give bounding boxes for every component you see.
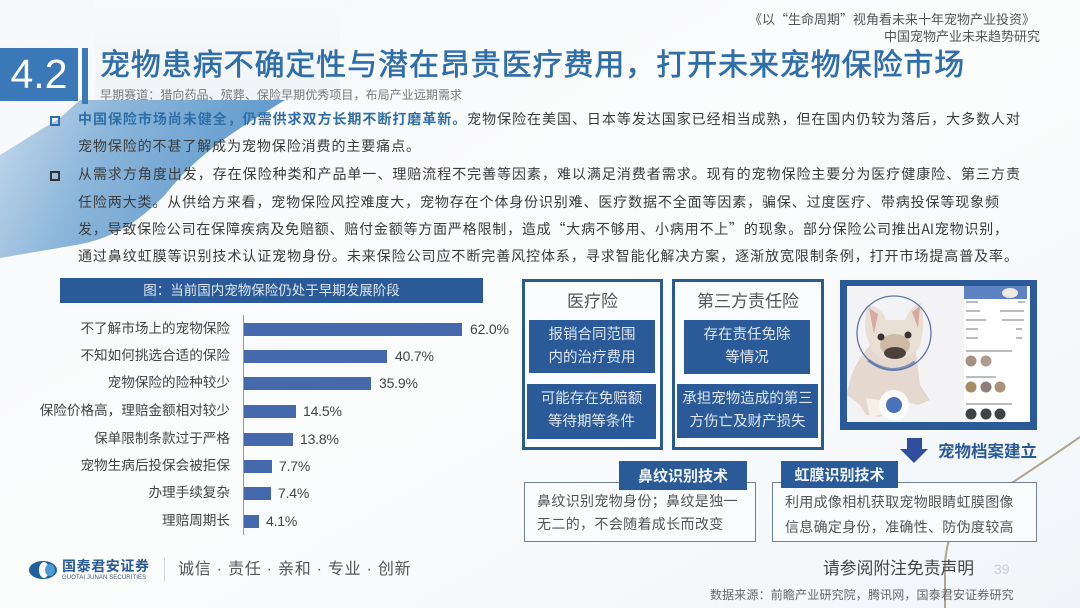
bar chart [40,315,509,535]
bar chart: 35.9% [379,375,418,391]
text block: market overview [50,109,1020,156]
liability box: 方伤亡及财产损失 [690,414,806,430]
data source: 数据来源：前瞻产业研究院，腾讯网，国泰君安证券研究 [710,588,1014,602]
liability box [677,384,818,438]
panel heading [781,461,898,488]
bar chart: 不了解市场上的宠物保险 [80,321,230,336]
logo: Guotai Junan: 国泰君安证券 [62,558,150,574]
sub heading: 早期赛道：猎向药品、殡葬、保险早期优秀项目，布局产业远期需求 [100,88,462,102]
disclaimer: 请参阅附注免责声明 [823,559,974,578]
report title top right: 《以“生命周期”视角看未来十年宠物产业投资》 [749,9,1035,28]
section number [0,48,78,101]
bar chart: 14.5% [303,403,342,419]
text block: demand and supply: 任险两大类。从供给方来看，宠物保险风控难度大，宠物存在个体身份识别难、医疗数据不全面等因素，骗保、过度医疗、带病投保等现象频 [78,192,999,212]
bar chart: 保单限制条款过于严格 [94,431,230,446]
bar chart: 保险价格高，理赔金额相对较少 [40,403,230,418]
panel body: 利用成像相机获取宠物眼睛虹膜图像 [785,494,1014,510]
report title top right: 中国宠物产业未来趋势研究 [884,26,1040,45]
panel heading: 医疗险 [567,292,618,311]
text block: demand and supply [50,164,1020,266]
panel body: 无二的，不会随着成长而改变 [537,516,724,532]
panel heading: 鼻纹识别技术 [638,468,728,485]
icon: logo mark [29,561,57,579]
text block: market overview: 宠物保险的不甚了解成为宠物保险消费的主要痛点。 [78,136,420,156]
bar chart: 宠物生病后投保会被拒保 [80,458,230,473]
exemption box: 等情况 [725,350,769,366]
coverage box [529,320,655,373]
text block: market overview: 中国保险市场尚未健全，仍需供求双方长期不断打磨革新。宠物保险在美国、日本等发达国家已经相当成熟，但在国内仍较为落后，大多数人对 [78,109,1020,129]
bar chart: 理赔周期长 [162,513,230,528]
panel body: 鼻纹识别宠物身份；鼻纹是独一 [537,493,738,509]
bar chart: 办理手续复杂 [148,485,230,500]
bar chart: 7.7% [279,458,310,474]
conditions box: 可能存在免赔额 [541,391,642,407]
text block: demand and supply: 发，导致保险公司在保障疾病及免赔额、赔付金额等方面严格限制，造成“大病不够用、小病用不上”的现象。部分保险公司推出AI宠物识别， [78,219,1008,239]
bullet square [50,171,60,181]
panel heading: 第三方责任险 [697,292,799,311]
divider [164,558,165,581]
chart title bar: 图：当前国内宠物保险仍处于早期发展阶段 [143,283,400,298]
bar chart: 4.1% [266,513,297,529]
arrow: down [900,438,928,463]
main heading: 宠物患病不确定性与潜在昂贵医疗费用，打开未来宠物保险市场 [100,49,965,82]
panel body [524,482,756,542]
accent bar [82,48,88,104]
logo: Guotai Junan [29,558,150,581]
conditions box: 等待期等条件 [548,414,635,430]
liability box: 承担宠物造成的第三 [682,391,813,407]
bar chart: 13.8% [300,431,339,447]
logo: Guotai Junan: GUOTAI JUNAN SECURITIES [62,575,146,581]
page number: 39 [994,561,1010,577]
caption: pet profile: 宠物档案建立 [938,443,1037,461]
bar chart: 宠物保险的险种较少 [108,375,230,390]
bar chart: 不知如何挑选合适的保险 [80,348,230,363]
panel heading [619,461,747,490]
text block: demand and supply: 通过鼻纹虹膜等识别技术认证宠物身份。未来保险公司应不断完善风控体系，寻求智能化解决方案，逐渐放宽限制条例，打开市场提高普及率。 [78,246,1018,266]
conditions box [527,384,656,439]
exemption box [684,320,810,374]
panel: iris technology [772,461,1037,542]
coverage box: 内的治疗费用 [548,350,636,366]
panel body [772,482,1037,542]
bar chart: 7.4% [278,485,309,501]
section number: 4.2 [10,51,68,97]
report title top right [749,9,1040,45]
exemption box: 存在责任免除 [704,327,790,343]
text block: demand and supply: 从需求方角度出发，存在保险种类和产品单一、理赔流程不完善等因素，难以满足消费者需求。现有的宠物保险主要分为医疗健康险、第三方责 [78,164,1020,184]
coverage box: 报销合同范围 [548,327,636,343]
bar chart: 62.0% [470,321,509,337]
slogan: 诚信 · 责任 · 亲和 · 专业 · 创新 [178,561,411,578]
bar chart: 40.7% [395,348,434,364]
panel body: 信息确定身份，准确性、防伪度较高 [785,519,1014,535]
panel heading: 虹膜识别技术 [794,467,884,484]
panel: medical insurance [522,279,663,450]
panel: nose print technology [524,461,756,542]
bullet square [50,116,60,126]
photo: dog identification card [840,280,1037,430]
chart title bar [60,278,483,303]
panel: third party liability insurance [672,279,824,450]
